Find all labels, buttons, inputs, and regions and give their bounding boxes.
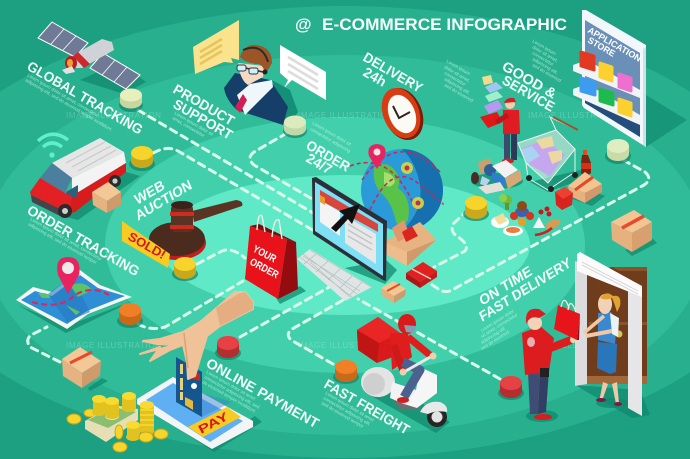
label: global tracking: Lorem ipsum dolor sit amet, consectetur — [26, 73, 100, 118]
icon: speech bubble yellow — [193, 20, 239, 74]
icon: shopping cart — [518, 117, 585, 192]
lorem block near delivery — [444, 59, 474, 103]
node: yellow 3 — [129, 146, 155, 171]
label: order tracking: adipiscing elit, sed do eiusmod tempor — [28, 222, 98, 265]
icon: woman receiving bag — [584, 293, 628, 408]
label: order tracking: ORDER TRACKING — [24, 202, 143, 279]
watermarks: IMAGE ILLUSTRATION — [66, 111, 162, 120]
icon: reaching hand — [140, 292, 253, 379]
icon: sold sign — [122, 221, 170, 268]
icon: coins and cash — [67, 392, 168, 452]
watermarks: IMAGE ILLUSTRATION — [66, 341, 162, 350]
label: order 24/7 — [304, 121, 353, 177]
icon: cola bottle — [581, 150, 591, 176]
label: on time fast delivery: sit amet, consectetur — [480, 312, 519, 339]
cursor arrow — [331, 204, 360, 232]
label: web auction: WEB — [132, 176, 167, 208]
dashed connection routes — [28, 110, 649, 379]
icon: scooter with courier — [357, 314, 450, 433]
label: product support: SUPPORT — [170, 96, 236, 143]
node: light green 2 — [283, 116, 307, 138]
label: delivery 24h: 24h — [360, 64, 389, 90]
node: yellow 5 — [463, 196, 489, 221]
node: orange 7 — [117, 303, 143, 328]
icon: computer monitor — [312, 177, 397, 284]
label: product support: PRODUCT — [170, 81, 238, 129]
icon: globe with pin — [350, 144, 443, 231]
label: global tracking: adipiscing elit, sed do eiusmod tempor incididunt — [24, 78, 113, 132]
lorem block near delivery: adipiscing elit, — [444, 77, 471, 95]
lorem block near delivery: consectetur — [444, 71, 467, 87]
label: good and service: dolor sit amet, — [532, 45, 559, 63]
watermarks — [66, 111, 624, 350]
watermarks: IMAGE ILLUSTRATION — [528, 341, 624, 350]
icon: small red box — [555, 187, 573, 210]
icon: red shopping bag: ORDER — [248, 256, 281, 281]
icon: red shopping bag: YOUR — [251, 243, 279, 266]
icon: application store tablet: STORE — [586, 35, 617, 59]
icon: big cardboard box right — [611, 210, 657, 256]
icon: red box — [406, 262, 437, 288]
label: product support: amet, consectetur — [172, 116, 206, 138]
map pin — [368, 144, 386, 169]
node: light green 4 — [605, 139, 631, 164]
label: on time fast delivery: FAST DELIVERY — [477, 254, 574, 325]
label: good and service: sed do eiusmod — [532, 63, 562, 83]
label: online payment: Lorem ipsum dolor sit amet — [206, 370, 257, 402]
label: web auction: AUCTION — [133, 176, 194, 224]
icon: application store tablet — [573, 10, 687, 147]
node: red 10 — [498, 376, 524, 400]
label: on time fast delivery: sed do eiusmod — [480, 329, 510, 351]
label: fast freight: FAST FREIGHT — [322, 376, 413, 438]
icon: grocery items — [471, 158, 523, 194]
lorem block near delivery: Lorem ipsum — [446, 59, 471, 76]
watermarks: IMAGE ILLUSTRATION — [528, 111, 624, 120]
node: red 8 — [215, 336, 241, 360]
icon: small box — [381, 281, 406, 303]
icon: delivery man with stacked boxes — [480, 75, 520, 164]
label: global tracking: GLOBAL TRACKING — [24, 58, 146, 138]
icon: courier handing bag — [522, 300, 580, 422]
icon: speech bubble white — [280, 45, 326, 100]
label: on time fast delivery: ON TIME — [477, 262, 534, 309]
icon: box beside van — [92, 182, 121, 213]
label: online payment: ONLINE PAYMENT — [204, 355, 322, 431]
red bag — [554, 300, 580, 340]
icon: application store tablet: APPLICATION — [586, 25, 643, 64]
watermarks: IMAGE ILLUSTRATION — [298, 341, 394, 350]
watermarks: IMAGE ILLUSTRATION — [298, 111, 394, 120]
lorem block near delivery: dolor sit amet, — [444, 65, 471, 83]
label: good and service — [500, 39, 562, 115]
label: product support: Lorem ipsum dolor sit — [174, 111, 215, 137]
lorem block near delivery: sed do eiusmod — [444, 83, 474, 103]
node: yellow 6 — [172, 257, 198, 281]
label: online payment: consectetur adipiscing elit, sed — [204, 375, 261, 410]
icon: cardboard box near bottle — [568, 172, 605, 206]
label: good and service: consectetur — [532, 51, 555, 67]
label: fast freight: Lorem ipsum dolor sit amet — [324, 391, 376, 423]
node: light green 1 — [119, 88, 143, 112]
label: order 24/7: ORDER — [304, 137, 353, 175]
label: good and service: adipiscing elit, — [532, 57, 559, 75]
icon: delivery van — [30, 138, 140, 220]
icon: sold sign: SOLD! — [126, 229, 168, 262]
label: order 24/7: Lorem ipsum dolor sit — [312, 121, 353, 147]
title: E-COMMERCE INFOGRAPHIC — [322, 15, 567, 34]
icon: support agent — [224, 45, 298, 125]
icon: open carton near globe — [384, 220, 436, 266]
icon: satellite — [38, 22, 146, 94]
node: orange 9 — [333, 360, 359, 384]
label: delivery 24h: DELIVERY — [360, 49, 426, 96]
icon: red shopping bag — [245, 215, 306, 304]
icon: smartphone payment — [137, 377, 262, 452]
icon: food plates — [491, 194, 562, 236]
map pin — [57, 257, 80, 294]
label: good and service: SERVICE — [500, 72, 558, 115]
icon: wifi signal — [38, 134, 68, 158]
label: fast freight: consectetur adipiscing elit — [322, 396, 371, 427]
label: fast freight: sed do eiusmod tempor — [320, 401, 365, 429]
label: good and service: Lorem ipsum — [532, 39, 557, 56]
label: on time fast delivery: adipiscing elit — [480, 326, 507, 345]
label: order 24/7: 24/7 — [304, 150, 335, 177]
icon: clock — [375, 82, 431, 146]
label: good and service: GOOD & — [500, 58, 559, 102]
title: @ — [295, 15, 312, 34]
icon: keyboard — [297, 249, 372, 301]
icon: box near map — [62, 347, 108, 391]
icon: smartphone payment: PAY — [196, 409, 231, 437]
app icons — [581, 52, 631, 116]
icon: auction gavel — [148, 200, 242, 260]
label: online payment: do eiusmod tempor incididunt — [202, 380, 257, 414]
label: order tracking: Lorem ipsum dolor sit amet, consectetur — [30, 217, 103, 262]
icon: doorway with door — [575, 252, 650, 418]
label: order 24/7: consectetur adipiscing — [310, 127, 352, 154]
icon: map with pin — [16, 257, 135, 333]
label: on time fast delivery: Lorem ipsum dolor — [480, 308, 515, 333]
icon: credit card — [176, 357, 202, 417]
